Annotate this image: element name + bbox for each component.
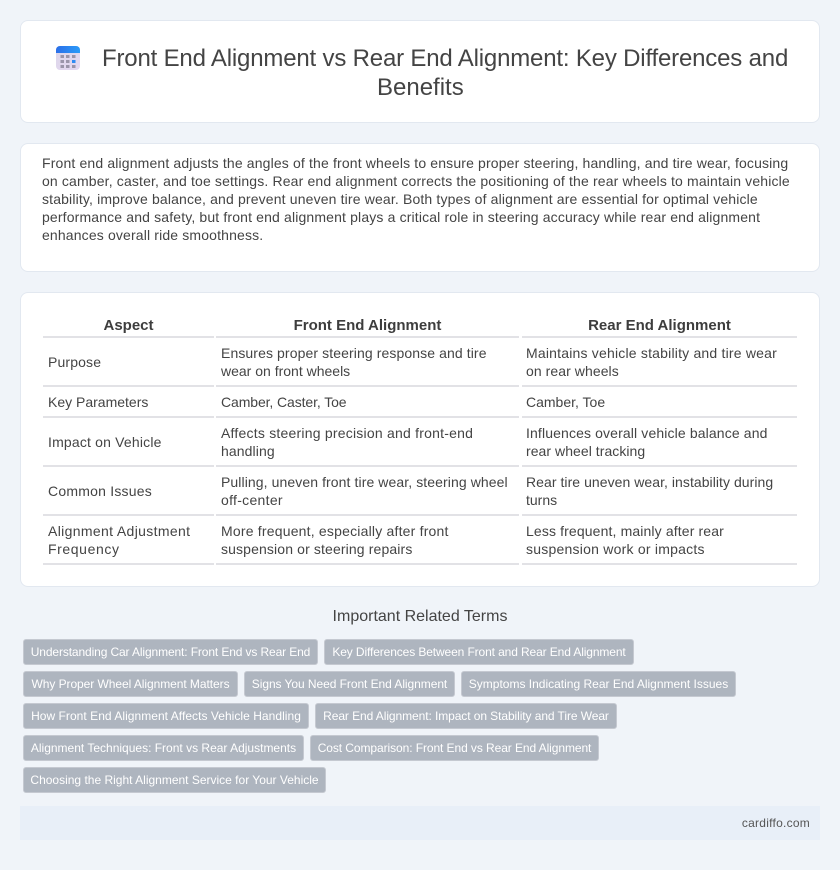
- row: Impact on Vehicle: [48, 425, 768, 459]
- chip: Alignment Techniques: Front vs Rear Adjustments: [31, 741, 296, 755]
- row: Common Issues: Pulling, uneven front tire wear, steering wheel: [221, 474, 508, 490]
- intro paragraph: on camber, caster, and toe settings. Rear end alignment corrects the positioning of the rear wheels to maintain vehicle: [42, 173, 790, 189]
- chip: Why Proper Wheel Alignment Matters: [31, 677, 230, 691]
- chip: [23, 703, 309, 729]
- chip: How Front End Alignment Affects Vehicle Handling: [31, 709, 301, 723]
- header: Aspect: [43, 316, 214, 338]
- chip: [310, 735, 599, 761]
- row: Impact on Vehicle: handling: [221, 443, 275, 459]
- row: Purpose: wear on front wheels: [221, 363, 350, 379]
- row: Alignment Adjustment Frequency: [48, 523, 724, 557]
- chip: [23, 767, 326, 793]
- row: Purpose: Maintains vehicle stability and tire wear: [526, 345, 777, 361]
- row: Key Parameters: [48, 394, 605, 410]
- row: Impact on Vehicle: rear wheel tracking: [526, 443, 645, 459]
- row: Common Issues: [48, 474, 773, 508]
- chip: Understanding Car Alignment: Front End vs Rear End: [31, 645, 310, 659]
- row: Alignment Adjustment Frequency: Alignment Adjustment: [48, 523, 190, 539]
- row: Impact on Vehicle: Impact on Vehicle: [48, 434, 162, 450]
- header: Front End Alignment: Front End Alignment: [294, 317, 441, 334]
- intro paragraph: [42, 155, 790, 243]
- panel: introduction: [20, 143, 820, 272]
- row: Key Parameters: Key Parameters: [48, 394, 148, 410]
- row: Common Issues: Rear tire uneven wear, instability during: [526, 474, 773, 490]
- footer source text: cardiffo.com: [742, 816, 810, 830]
- row: Purpose: [48, 345, 777, 379]
- panel: comparison table: [20, 292, 820, 587]
- chip: Rear End Alignment: Impact on Stability and Tire Wear: [323, 709, 609, 723]
- row: Purpose: Ensures proper steering response and tire: [221, 345, 487, 361]
- row: Alignment Adjustment Frequency: More frequent, especially after front: [221, 523, 449, 539]
- header: Aspect: Aspect: [103, 317, 154, 334]
- heading: Important Related Terms: Important Related Terms: [333, 608, 507, 625]
- row: Alignment Adjustment Frequency: Less frequent, mainly after rear: [526, 523, 724, 539]
- chip: [324, 639, 634, 665]
- footer: [20, 806, 820, 840]
- row: Alignment Adjustment Frequency: Frequency: [48, 541, 120, 557]
- chip: [23, 671, 238, 697]
- chip: [23, 735, 304, 761]
- header: Rear End Alignment: [522, 316, 797, 338]
- row: Purpose: on rear wheels: [526, 363, 619, 379]
- intro paragraph: Front end alignment adjusts the angles of the front wheels to ensure proper steering, handling, and tire wear, focusing: [42, 155, 788, 171]
- chip: Choosing the Right Alignment Service for Your Vehicle: [30, 773, 319, 787]
- row: Impact on Vehicle: Influences overall vehicle balance and: [526, 425, 768, 441]
- row: Common Issues: Common Issues: [48, 483, 152, 499]
- row: Common Issues: turns: [526, 492, 557, 508]
- chip: Key Differences Between Front and Rear End Alignment: [332, 645, 626, 659]
- icon: calendar: [56, 46, 80, 70]
- title: Benefits: [377, 74, 464, 101]
- row: Purpose: Purpose: [48, 354, 101, 370]
- row: Alignment Adjustment Frequency: suspension or steering repairs: [221, 541, 412, 557]
- header: Front End Alignment: [216, 316, 519, 338]
- intro paragraph: stability, improve balance, and prevent uneven tire wear. Both types of alignment are essential for optimal vehicle: [42, 191, 758, 207]
- intro paragraph: performance and safety, but front end alignment plays a critical role in steering accuracy while rear end alignment: [42, 209, 760, 225]
- chip: [244, 671, 455, 697]
- related terms chips: [23, 639, 736, 793]
- chip: [23, 639, 318, 665]
- row: Impact on Vehicle: Affects steering precision and front-end: [221, 425, 473, 441]
- chip: Signs You Need Front End Alignment: [252, 677, 447, 691]
- title: [102, 45, 788, 101]
- row: Alignment Adjustment Frequency: suspension work or impacts: [526, 541, 705, 557]
- chip: [461, 671, 736, 697]
- chip: Symptoms Indicating Rear End Alignment Issues: [469, 677, 728, 691]
- row: Key Parameters: Camber, Toe: [526, 394, 605, 410]
- header: Rear End Alignment: Rear End Alignment: [588, 317, 731, 334]
- row: Common Issues: off-center: [221, 492, 283, 508]
- panel: title header: [20, 20, 820, 123]
- intro paragraph: enhances overall ride smoothness.: [42, 227, 263, 243]
- title: Front End Alignment vs Rear End Alignment: Key Differences and: [102, 45, 788, 72]
- chip: Cost Comparison: Front End vs Rear End Alignment: [318, 741, 591, 755]
- chip: [315, 703, 617, 729]
- row: Key Parameters: Camber, Caster, Toe: [221, 394, 346, 410]
